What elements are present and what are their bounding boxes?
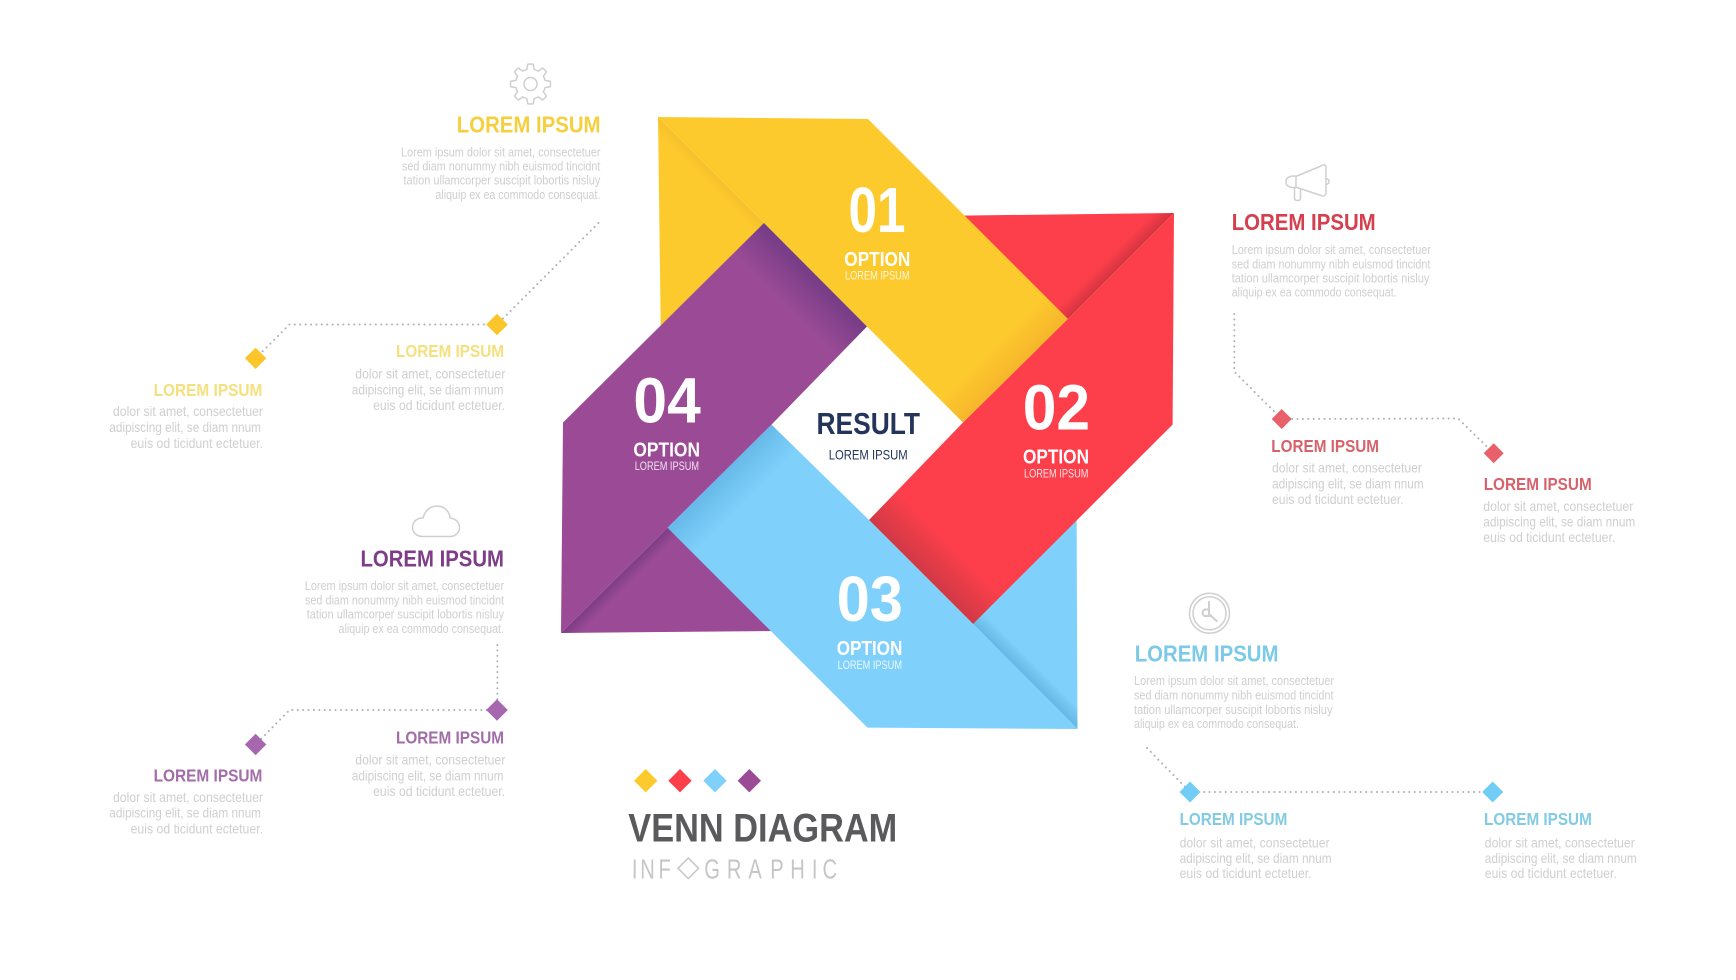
label: option 03: OPTION <box>837 638 902 660</box>
body text: tation ullamcorper suscipit lobortis nisluy <box>1232 271 1430 285</box>
sub-item: adipiscing elit, se diam nnum <box>1272 475 1424 491</box>
marker diamond <box>1180 782 1200 802</box>
dotted connector <box>256 645 497 744</box>
folded triangle: blue <box>955 490 1078 729</box>
sub-item: adipiscing elit, se diam nnum <box>352 381 504 397</box>
sub-item: adipiscing elit, se diam nnum <box>1483 514 1635 530</box>
sub-item: euis od ticidunt ectetuer. <box>1272 491 1404 507</box>
folded triangle: red <box>930 213 1174 347</box>
sub-item <box>1271 436 1424 507</box>
body text: tation ullamcorper suscipit lobortis nisluy <box>1134 703 1333 717</box>
sub-item: dolor sit amet, consectetuer <box>1180 834 1330 850</box>
label: option 04: OPTION <box>633 440 700 462</box>
title block <box>628 769 897 885</box>
sub-item: dolor sit amet, consectetuer <box>1485 834 1635 850</box>
sub-item: dolor sit amet, consectetuer <box>113 789 263 805</box>
band: option 02 red <box>869 213 1174 624</box>
center label: result: LOREM IPSUM <box>829 446 908 462</box>
sub-item: LOREM IPSUM <box>1180 809 1287 829</box>
sub-item: adipiscing elit, se diam nnum <box>1180 850 1332 866</box>
label: option 02 <box>1023 372 1090 481</box>
body text: Lorem ipsum dolor sit amet, consectetuer <box>305 579 504 593</box>
dotted connector <box>1147 748 1493 792</box>
body text: aliquip ex ea commodo consequat. <box>1232 286 1397 300</box>
sub-item: adipiscing elit, se diam nnum <box>352 768 504 784</box>
sub-item: dolor sit amet, consectetuer <box>355 365 506 381</box>
title: VENN DIAGRAM <box>628 807 897 851</box>
label: option 04 <box>633 364 701 473</box>
body text: Lorem ipsum dolor sit amet, consectetuer <box>1232 243 1431 257</box>
heading: LOREM IPSUM <box>360 546 504 572</box>
sub-item: euis od ticidunt ectetuer. <box>1483 529 1615 545</box>
diagram: four-part folded pinwheel <box>561 117 1174 729</box>
sub-item: LOREM IPSUM <box>396 728 504 748</box>
sub-item: euis od ticidunt ectetuer. <box>1485 865 1617 881</box>
sub-item: adipiscing elit, se diam nnum <box>109 805 261 821</box>
body text <box>1134 674 1334 731</box>
label: option 04: 04 <box>633 364 701 436</box>
body text: Lorem ipsum dolor sit amet, consectetuer <box>1134 674 1334 688</box>
sub-item: adipiscing elit, se diam nnum <box>109 419 261 435</box>
subtitle: GRAPHIC <box>704 854 837 885</box>
sub-item: dolor sit amet, consectetuer <box>355 752 506 768</box>
sub-item <box>1180 809 1332 881</box>
label: option 01: OPTION <box>844 249 910 271</box>
body text: sed diam nonummy nibh euismod tincidnt <box>402 160 601 174</box>
label: option 03: LOREM IPSUM <box>838 658 902 672</box>
body text <box>401 145 601 202</box>
marker diamond <box>245 734 266 755</box>
panel: purple option details <box>109 506 508 837</box>
sub-item: dolor sit amet, consectetuer <box>113 403 263 419</box>
band: option 01 yellow <box>658 117 1068 422</box>
sub-item <box>1484 809 1637 881</box>
icon: clock <box>1190 593 1230 633</box>
marker diamond <box>245 348 266 369</box>
sub-item: LOREM IPSUM <box>396 341 504 361</box>
dotted connector <box>1234 314 1494 453</box>
body text: tation ullamcorper suscipit lobortis nisluy <box>307 608 505 622</box>
sub-item: LOREM IPSUM <box>154 765 262 785</box>
body text: tation ullamcorper suscipit lobortis nisluy <box>403 174 601 188</box>
folded triangle: yellow <box>658 117 790 350</box>
sub-item: euis od ticidunt ectetuer. <box>373 783 505 799</box>
body text: aliquip ex ea commodo consequat. <box>435 188 600 202</box>
heading: LOREM IPSUM <box>457 112 600 138</box>
panel: yellow option details <box>109 64 601 451</box>
sub-item: LOREM IPSUM <box>1484 809 1592 829</box>
body text: sed diam nonummy nibh euismod tincidnt <box>1134 688 1334 702</box>
dotted connector <box>256 223 598 358</box>
marker diamond <box>1484 443 1504 463</box>
panel: blue option details <box>1134 593 1637 881</box>
panel: red option details <box>1232 165 1635 545</box>
label: option 02: 02 <box>1023 372 1090 444</box>
marker diamond <box>486 699 508 721</box>
sub-item <box>1483 474 1635 545</box>
body text: aliquip ex ea commodo consequat. <box>338 622 504 636</box>
heading: LOREM IPSUM <box>1135 641 1278 667</box>
body text <box>305 579 505 636</box>
sub-item: dolor sit amet, consectetuer <box>1483 498 1634 514</box>
label: option 04: LOREM IPSUM <box>635 459 699 473</box>
marker diamond <box>486 314 508 335</box>
sub-item <box>109 765 263 837</box>
label: option 01 <box>844 174 910 282</box>
sub-item: LOREM IPSUM <box>1271 436 1379 456</box>
body text <box>1232 243 1431 300</box>
label: option 03: 03 <box>837 563 903 635</box>
icon: cloud <box>412 506 460 536</box>
label: option 01: LOREM IPSUM <box>845 268 910 282</box>
band: option 03 blue <box>668 425 1078 729</box>
sub-item: adipiscing elit, se diam nnum <box>1485 850 1637 866</box>
legend diamonds <box>634 769 761 792</box>
body text: aliquip ex ea commodo consequat. <box>1134 717 1299 731</box>
subtitle: INF <box>632 854 671 885</box>
sub-item <box>109 380 263 451</box>
sub-item <box>352 341 506 413</box>
sub-item: euis od ticidunt ectetuer. <box>373 397 505 413</box>
sub-item: euis od ticidunt ectetuer. <box>131 435 263 451</box>
icon: megaphone <box>1286 165 1329 200</box>
sub-item: euis od ticidunt ectetuer. <box>1180 865 1312 881</box>
label: option 03 <box>837 563 903 672</box>
icon: gear <box>510 64 551 104</box>
heading: LOREM IPSUM <box>1232 209 1376 235</box>
sub-item: dolor sit amet, consectetuer <box>1272 460 1422 476</box>
marker diamond <box>1482 782 1503 802</box>
sub-item: euis od ticidunt ectetuer. <box>131 821 263 837</box>
label: option 02: LOREM IPSUM <box>1024 467 1088 481</box>
band: option 04 purple <box>561 223 867 633</box>
center label: result: RESULT <box>816 406 920 441</box>
body text: sed diam nonummy nibh euismod tincidnt <box>1232 257 1431 271</box>
sub-item: LOREM IPSUM <box>1484 474 1592 494</box>
marker diamond <box>1272 409 1292 429</box>
folded triangle: purple <box>561 520 805 633</box>
sub-item: LOREM IPSUM <box>154 380 262 400</box>
sub-item <box>352 728 506 799</box>
body text: Lorem ipsum dolor sit amet, consectetuer <box>401 145 600 159</box>
center label: result <box>816 406 920 462</box>
subtitle <box>632 854 837 885</box>
label: option 02: OPTION <box>1023 447 1089 469</box>
body text: sed diam nonummy nibh euismod tincidnt <box>305 593 504 607</box>
label: option 01: 01 <box>848 174 906 246</box>
